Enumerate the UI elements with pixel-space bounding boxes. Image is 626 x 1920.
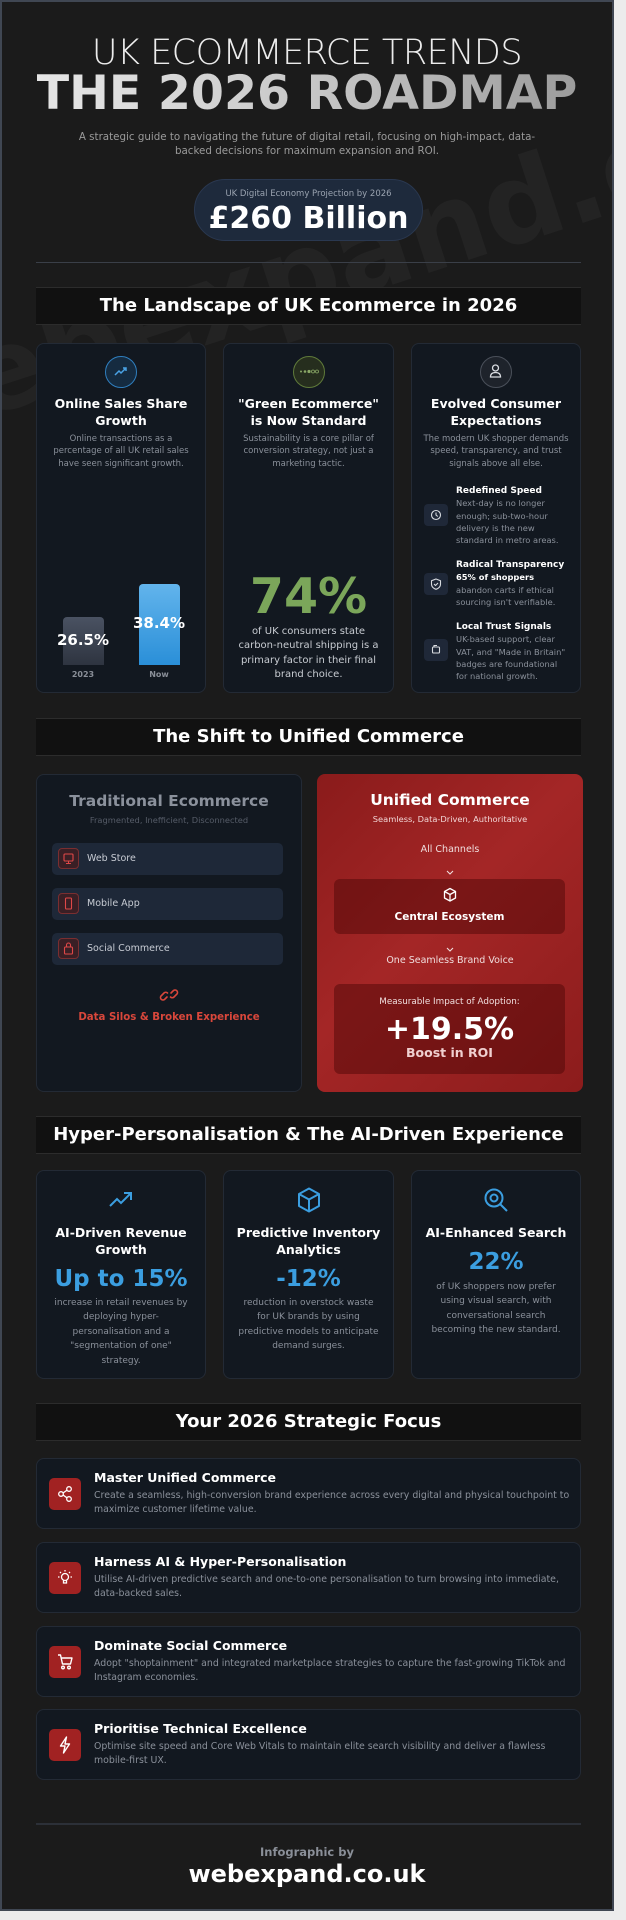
card: AI revenue: "segmentation of one" [70, 1341, 172, 1351]
item: local trust [424, 639, 448, 661]
icon: leaf dots [293, 356, 325, 388]
card: AI revenue: deploying hyper- [83, 1312, 159, 1322]
card: AI search: of UK shoppers now prefer [436, 1282, 556, 1292]
panel: unified commerce: Seamless, Data-Driven, Authoritative [373, 814, 527, 824]
section heading: landscape [36, 287, 581, 325]
icon: trend [109, 1192, 132, 1207]
panel: unified commerce: One Seamless Brand Voice [386, 955, 514, 966]
card: AI revenue: personalisation and a [72, 1327, 169, 1337]
focus: unified commerce [36, 1458, 581, 1529]
icon: user [480, 356, 512, 388]
title line 2: THE 2026 ROADMAP [37, 66, 577, 121]
card: AI search [411, 1170, 581, 1379]
card: AI search: conversational search [447, 1311, 545, 1321]
focus: AI: data-backed sales. [94, 1588, 182, 1599]
card: online sales share: Online Sales Share [55, 396, 187, 411]
card: AI revenue: Growth [95, 1242, 147, 1257]
card: online sales share: Online transactions as a [70, 434, 172, 444]
section heading: strategic focus: Your 2026 Strategic Focus [176, 1411, 441, 1432]
card: predictive inventory: demand surges. [272, 1341, 345, 1351]
bar chart: 38.4% [133, 614, 185, 632]
card: consumer expectations: The modern UK shopper demands [423, 434, 569, 444]
impact box [334, 984, 565, 1074]
card: predictive inventory: Predictive Inventory [237, 1225, 380, 1240]
item: social commerce: Social Commerce [87, 943, 170, 954]
icon: box [298, 1188, 320, 1212]
footer credit [188, 1845, 426, 1888]
focus: AI [36, 1542, 581, 1613]
card: online sales share: have seen significant growth. [58, 459, 184, 469]
icon: broken link [160, 989, 178, 1001]
card: predictive inventory: predictive models to anticipate [238, 1327, 379, 1337]
stat pill: UK Digital Economy Projection by 2026 [225, 189, 392, 199]
card: consumer expectations: UK-based support, clear [456, 634, 555, 644]
card: consumer expectations: badges are foundational [456, 659, 557, 669]
card: AI revenue [36, 1170, 206, 1379]
focus: AI: Harness AI & Hyper-Personalisation [94, 1554, 346, 1569]
central ecosystem box: Central Ecosystem [395, 911, 504, 923]
section heading: unified commerce [36, 718, 581, 756]
card: AI search: 22% [468, 1249, 524, 1275]
icon: trend [105, 356, 137, 388]
stat 74%: 74% [250, 568, 367, 625]
card: AI revenue: strategy. [101, 1356, 141, 1366]
central ecosystem box [334, 879, 565, 934]
item: transparency [424, 573, 448, 595]
section heading: strategic focus [36, 1403, 581, 1441]
subtitle: A strategic guide to navigating the future of digital retail, focusing on high-impact, data- [79, 131, 535, 143]
focus: unified commerce: Master Unified Commerce [94, 1470, 276, 1485]
card: consumer expectations: standard in metro areas. [456, 535, 558, 545]
card: consumer expectations: abandon carts if ethical [456, 585, 554, 595]
footer credit: Infographic by [260, 1845, 354, 1859]
card: consumer expectations: speed, transparency, and trust [430, 446, 562, 456]
bar chart: Now [149, 670, 169, 679]
item: mobile app: Mobile App [87, 898, 140, 909]
card: green ecommerce: marketing tactic. [272, 459, 345, 469]
subtitle: backed decisions for maximum expansion and ROI. [175, 145, 439, 157]
bar chart: 2023 [72, 670, 94, 679]
card: AI revenue: Up to 15% [54, 1266, 188, 1292]
panel: unified commerce: Unified Commerce [370, 791, 530, 809]
impact box: +19.5% [385, 1012, 514, 1047]
impact box: Boost in ROI [406, 1045, 493, 1060]
focus: social commerce: Dominate Social Commerce [94, 1638, 287, 1653]
item: social commerce [52, 933, 283, 965]
icon: search [484, 1188, 508, 1212]
section heading: unified commerce: The Shift to Unified Commerce [153, 726, 464, 747]
focus: technical excellence [36, 1709, 581, 1780]
stat pill [194, 179, 423, 241]
focus: unified commerce: maximize customer lifetime value. [94, 1504, 257, 1515]
card: AI search: becoming the new standard. [431, 1325, 561, 1335]
arrow [446, 948, 454, 952]
card: green ecommerce: carbon-neutral shipping is a [238, 640, 379, 651]
title line 1: UK ECOMMERCE TRENDS [92, 33, 522, 73]
subtitle [79, 131, 535, 157]
card: green ecommerce [223, 343, 394, 693]
section heading: AI [36, 1116, 581, 1154]
focus: social commerce [36, 1626, 581, 1697]
bar chart [57, 584, 185, 679]
panel: traditional ecommerce [36, 774, 302, 1092]
card: consumer expectations: Local Trust Signals [456, 622, 551, 632]
card: consumer expectations: signals above all else. [449, 459, 543, 469]
card: predictive inventory: reduction in overstock waste [243, 1298, 374, 1308]
panel: unified commerce [317, 774, 583, 1092]
card: online sales share [36, 343, 206, 693]
focus: social commerce: Adopt "shoptainment" and integrated marketplace strategies to capture the fast-growing TikTok and [94, 1658, 565, 1669]
panel: unified commerce: All Channels [421, 844, 479, 855]
focus: AI: Utilise AI-driven predictive search and one-to-one personalisation to turn browsing into immediate, [94, 1574, 559, 1585]
card: consumer expectations: Evolved Consumer [431, 396, 561, 411]
focus: technical excellence: Optimise site speed and Core Web Vitals to maintain elite search visibility and deliver a flawless [94, 1741, 545, 1752]
item: web store [52, 843, 283, 875]
card: green ecommerce: conversion strategy, not just a [244, 446, 374, 456]
bar chart: 26.5% [57, 631, 109, 649]
focus: unified commerce: Create a seamless, high-conversion brand experience across every digital and physical touchpoint to [94, 1490, 569, 1501]
item: web store: Web Store [87, 853, 136, 864]
panel: traditional ecommerce: Traditional Ecommerce [69, 792, 269, 810]
item: speed [424, 504, 448, 526]
panel: traditional ecommerce: Data Silos & Broken Experience [78, 1012, 260, 1023]
card: consumer expectations [411, 343, 581, 693]
card: AI revenue: AI-Driven Revenue [55, 1225, 187, 1240]
card: predictive inventory [223, 1170, 394, 1379]
card: AI search: AI-Enhanced Search [426, 1225, 566, 1240]
card: green ecommerce: Sustainability is a core pillar of [243, 434, 374, 444]
card: consumer expectations: Next-day is no longer [456, 498, 545, 508]
focus: technical excellence: mobile-first UX. [94, 1755, 167, 1766]
card: green ecommerce: of UK consumers state [252, 626, 365, 637]
card: green ecommerce: is Now Standard [251, 413, 366, 428]
card: predictive inventory: -12% [276, 1266, 341, 1292]
card: online sales share: percentage of all UK retail sales [53, 446, 189, 456]
panel: traditional ecommerce: Fragmented, Inefficient, Disconnected [90, 815, 248, 825]
card: green ecommerce: "Green Ecommerce" [238, 396, 379, 411]
card: consumer expectations: 65% of shoppers [456, 572, 534, 582]
card: green ecommerce: primary factor in their final [241, 655, 376, 666]
stat pill: £260 Billion [209, 201, 408, 236]
card: consumer expectations: enough; sub-two-hour [456, 511, 548, 521]
focus: technical excellence: Prioritise Technical Excellence [94, 1721, 307, 1736]
card: consumer expectations: delivery is the new [456, 523, 535, 533]
card: AI revenue: increase in retail revenues by [54, 1298, 188, 1308]
item: mobile app [52, 888, 283, 920]
focus: social commerce: Instagram economies. [94, 1672, 198, 1683]
footer credit: webexpand.co.uk [188, 1860, 426, 1888]
arrow [446, 870, 454, 875]
section heading: AI: Hyper-Personalisation & The AI-Driven Experience [53, 1124, 564, 1145]
card: green ecommerce: brand choice. [274, 669, 342, 680]
card: predictive inventory: for UK brands by using [257, 1312, 360, 1322]
card: predictive inventory: Analytics [276, 1242, 341, 1257]
card: consumer expectations: sourcing isn't verifiable. [456, 597, 555, 607]
impact box: Measurable Impact of Adoption: [379, 997, 520, 1007]
section heading: landscape: The Landscape of UK Ecommerce in 2026 [100, 295, 517, 316]
card: online sales share: Growth [95, 413, 147, 428]
card: consumer expectations: VAT, and "Made in Britain" [456, 647, 565, 657]
card: AI search: using visual search, with [440, 1296, 551, 1306]
card: consumer expectations: Radical Transparency [456, 560, 564, 570]
card: consumer expectations: Redefined Speed [456, 486, 542, 496]
card: consumer expectations: for national growth. [456, 671, 538, 681]
card: consumer expectations: Expectations [450, 413, 542, 428]
